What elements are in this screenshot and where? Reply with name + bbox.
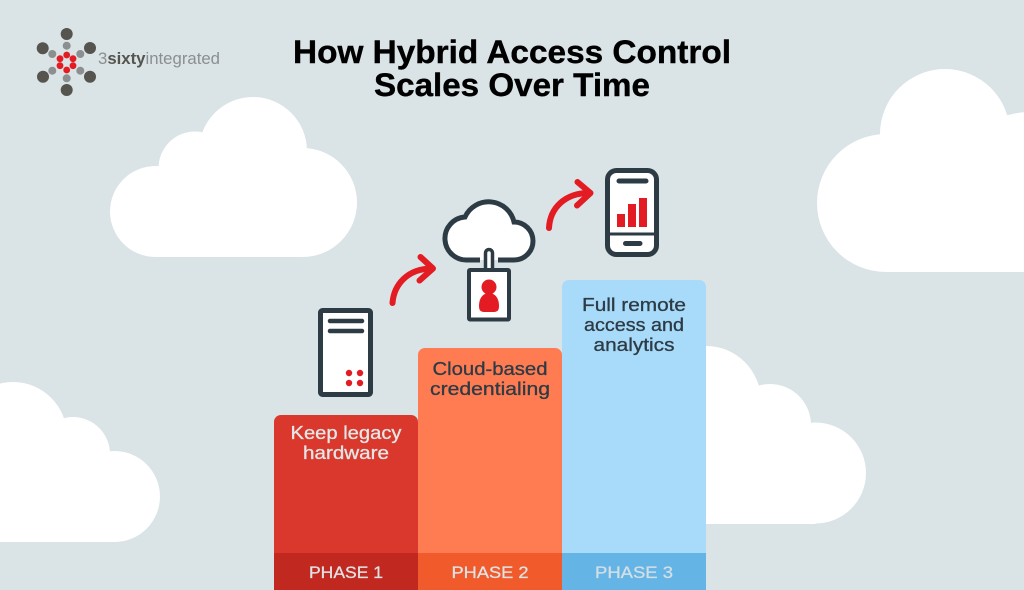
cloud outline xyxy=(445,202,533,260)
ID badge xyxy=(469,270,509,320)
icon: smartphone with bar chart xyxy=(606,170,658,254)
logo: 3sixtyintegrated xyxy=(37,28,220,96)
panel: phase 3 xyxy=(562,280,706,590)
cloud: upper left background xyxy=(110,97,357,257)
title: Scales Over Time xyxy=(374,67,650,103)
panel: phase 1 xyxy=(274,415,418,590)
phase 3 description xyxy=(582,295,686,355)
logo wordmark: 3sixtyintegrated xyxy=(98,49,220,68)
phase 1 description: hardware xyxy=(303,443,389,463)
cloud: lower right background xyxy=(651,346,866,524)
title: How Hybrid Access Control xyxy=(293,34,731,70)
icon: cloud with ID badge xyxy=(445,202,533,320)
phase 1 description: Keep legacy xyxy=(290,423,402,443)
badge strap xyxy=(486,250,492,274)
phase 1 label: PHASE 1 xyxy=(309,563,383,582)
phase 3 description: Full remote xyxy=(582,295,686,315)
arrow: phase 2 to phase 3 xyxy=(549,182,590,228)
phase 1 description xyxy=(290,423,402,463)
arrow: phase 1 to phase 2 xyxy=(392,257,433,303)
title xyxy=(293,34,731,103)
phase 3 description: analytics xyxy=(594,335,674,355)
phase 2 description: credentialing xyxy=(430,379,550,399)
icon: server tower xyxy=(320,310,370,394)
phase 3 label: PHASE 3 xyxy=(595,563,673,582)
cloud: lower left background xyxy=(0,382,160,542)
phase 3 description: access and xyxy=(584,315,684,335)
cloud fill xyxy=(445,202,533,260)
bar chart xyxy=(617,198,647,227)
phase 2 description xyxy=(430,359,550,399)
phase 2 description: Cloud-based xyxy=(432,359,548,379)
badge person xyxy=(479,280,499,312)
panel: phase 2 xyxy=(418,348,562,590)
cloud: upper right background xyxy=(817,69,1024,272)
logo mark: dots xyxy=(37,28,96,96)
phase 2 label: PHASE 2 xyxy=(452,563,528,582)
